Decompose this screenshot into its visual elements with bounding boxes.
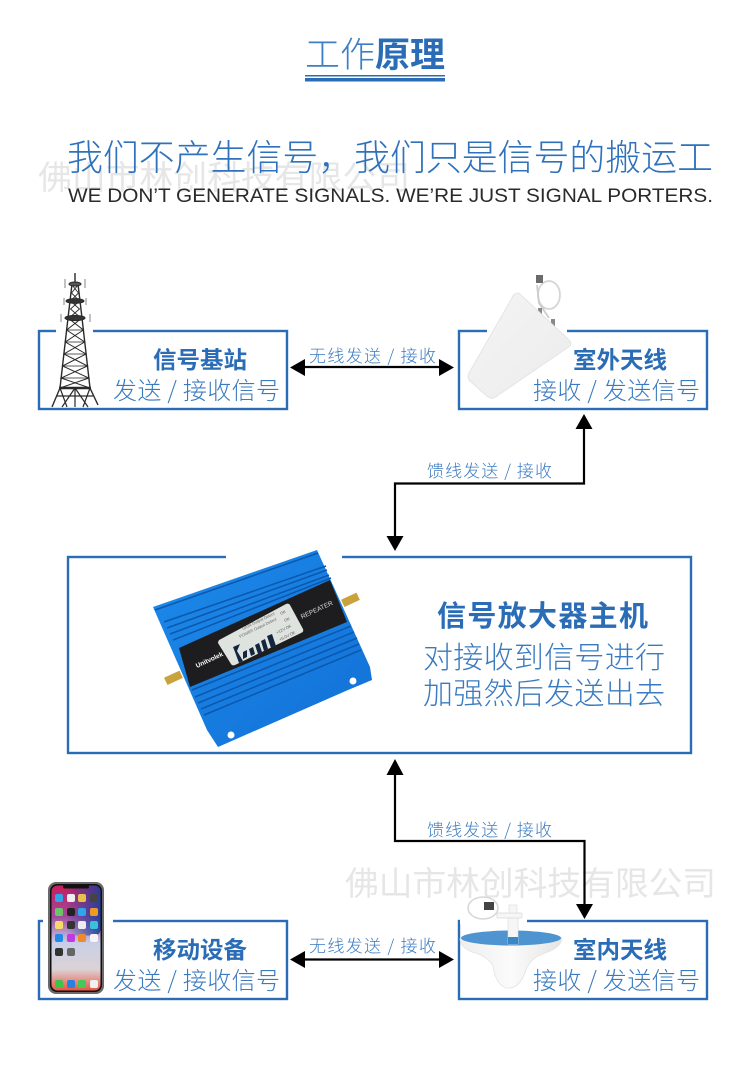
heading: repeater host: 信号放大器主机 xyxy=(437,600,648,633)
icon: outdoor antenna xyxy=(468,275,571,398)
heading: mobile device: 移动设备 xyxy=(153,937,248,963)
subheading: english: WE DON’T GENERATE SIGNALS. WE’RE JUST SIGNAL PORTERS. xyxy=(68,185,713,207)
label: wireless upper: 无线发送 / 接收 xyxy=(309,342,436,367)
icon: smartphone xyxy=(48,882,104,994)
icon: repeater device: GAIN Output Detect xyxy=(241,610,276,631)
icon: signal tower xyxy=(52,273,98,407)
panel: outdoor antenna xyxy=(459,275,707,409)
subheading: chinese: 我们不产生信号，我们只是信号的搬运工 xyxy=(67,129,713,181)
icon: repeater device: REPEATER xyxy=(300,600,334,621)
title: 原理 xyxy=(375,36,445,75)
panel: base station xyxy=(39,273,287,409)
caption: base station: 发送 / 接收信号 xyxy=(113,371,280,406)
label: wireless lower: 无线发送 / 接收 xyxy=(309,932,436,957)
icon: repeater device: OK xyxy=(279,609,287,616)
heading: outdoor antenna: 室外天线 xyxy=(573,346,667,373)
label: feeder lower: 馈线发送 / 接收 xyxy=(427,816,552,841)
arrow: feeder lower xyxy=(386,759,593,919)
panel: indoor antenna xyxy=(459,897,707,999)
caption: mobile device: 发送 / 接收信号 xyxy=(113,961,280,996)
icon: repeater device: +12V OK xyxy=(275,623,292,635)
icon: ceiling dome antenna xyxy=(460,897,562,988)
title: 工作 xyxy=(305,27,375,78)
title xyxy=(305,27,445,82)
caption: repeater line 1: 对接收到信号进行 xyxy=(423,633,665,677)
icon: repeater device: +5.0V OK xyxy=(278,630,296,642)
panel: repeater host xyxy=(68,550,691,753)
arrow: wireless upper xyxy=(290,359,454,376)
panel: mobile device xyxy=(39,882,287,999)
heading: base station: 信号基站 xyxy=(153,347,247,373)
arrow: feeder upper xyxy=(386,414,592,551)
watermark: lower: 佛山市林创科技有限公司 xyxy=(345,865,716,902)
watermark: top: 佛山市林创科技有限公司 xyxy=(38,159,410,196)
icon: repeater device xyxy=(153,550,372,747)
arrow: wireless lower xyxy=(290,951,454,968)
label: feeder upper: 馈线发送 / 接收 xyxy=(427,457,552,482)
heading: indoor antenna: 室内天线 xyxy=(573,936,667,963)
icon: repeater device: OK xyxy=(283,616,291,623)
icon: repeater device: Unitvolek xyxy=(195,651,225,670)
caption: outdoor antenna: 接收 / 发送信号 xyxy=(533,371,700,406)
caption: repeater line 2: 加强然后发送出去 xyxy=(423,669,665,713)
caption: indoor antenna: 接收 / 发送信号 xyxy=(533,961,700,996)
icon: repeater device: POWER Output Detect xyxy=(238,616,278,639)
